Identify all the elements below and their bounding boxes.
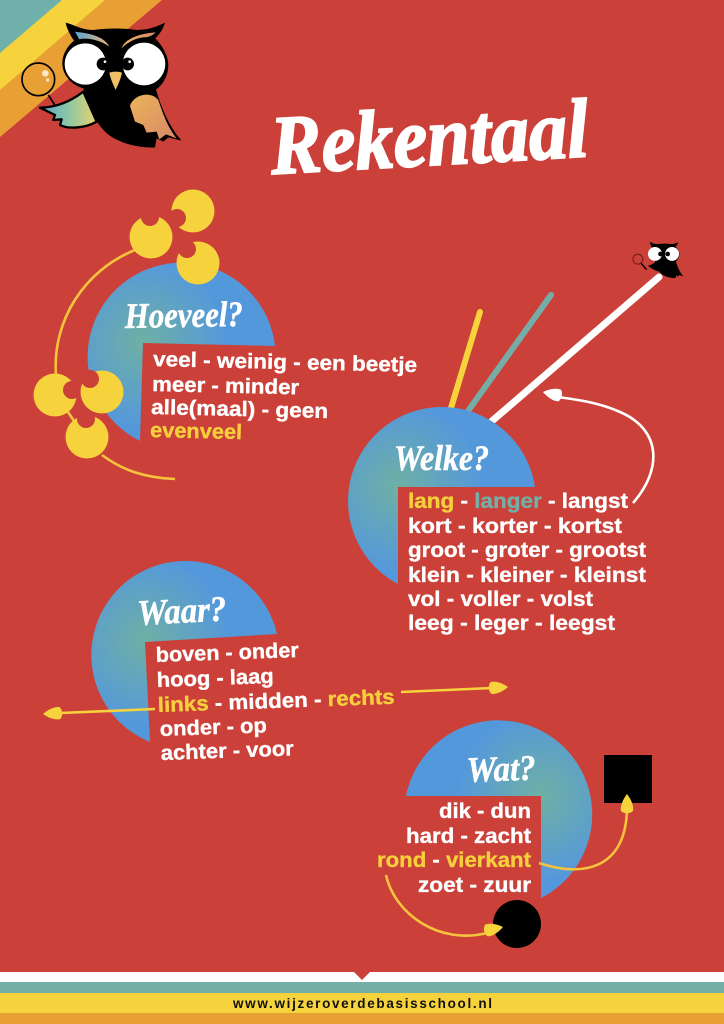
word list: Welke: vol - voller - volst — [408, 588, 593, 611]
word list: Waar: boven - onder — [155, 639, 299, 667]
panel: Waar — [43, 561, 508, 765]
footer url: www.wijzeroverdebasisschool.nl — [232, 996, 492, 1011]
word list: Waar: onder - op — [159, 714, 267, 741]
word list: Wat: zoet - zuur — [418, 874, 531, 897]
word list: Welke: lang - langer - langst — [408, 490, 628, 513]
word list: Waar: achter - voor — [160, 737, 294, 765]
word list: Hoeveel: alle(maal) - geen — [151, 396, 328, 423]
heading: Hoeveel?: Hoeveel? — [124, 294, 243, 336]
blue sector — [91, 561, 277, 742]
arrow: to square — [539, 794, 633, 869]
word list: Wat — [377, 800, 531, 897]
heading: Waar?: Waar? — [136, 588, 227, 633]
panel: Hoeveel — [34, 190, 417, 479]
word list: Hoeveel: meer - minder — [152, 373, 299, 399]
arrow: to longest bar — [542, 386, 653, 503]
icon: black square — [604, 755, 652, 803]
counters: yellow circles — [34, 190, 220, 458]
word list: Waar — [155, 639, 395, 765]
word list: Waar: links - midden - rechts — [157, 686, 395, 717]
word list: Hoeveel: veel - weinig - een beetje — [153, 348, 417, 377]
length bars — [451, 277, 659, 421]
word list: Welke: kort - korter - kortst — [408, 515, 622, 538]
panel: Wat — [377, 720, 652, 948]
icon: owl with magnifying glass — [22, 23, 182, 147]
word list: Wat: dik - dun — [439, 800, 531, 823]
title: Rekentaal — [267, 82, 591, 193]
heading: Welke?: Welke? — [394, 438, 489, 478]
word list: Waar: hoog - laag — [156, 665, 274, 692]
word list: Wat: rond - vierkant — [377, 849, 531, 872]
icon: small owl — [633, 242, 683, 278]
blue sector — [406, 720, 592, 898]
heading: Wat?: Wat? — [466, 748, 536, 790]
blue sector — [348, 407, 535, 584]
word list: Hoeveel: evenveel — [150, 419, 242, 444]
arrow: to circle — [386, 875, 504, 937]
word list: Wat: hard - zacht — [406, 825, 531, 848]
word list: Welke: klein - kleiner - kleinst — [408, 564, 646, 587]
blue sector — [88, 263, 275, 441]
panel: Welke — [348, 242, 683, 635]
arrow: left — [43, 707, 155, 720]
corner stripes — [0, 0, 162, 137]
footer bands — [0, 972, 724, 1024]
arcs connecting circles — [56, 250, 175, 479]
word list: Welke: leeg - leger - leegst — [408, 612, 615, 635]
word list: Welke — [408, 490, 646, 635]
arrow: right — [401, 681, 508, 694]
word list: Welke: groot - groter - grootst — [408, 539, 646, 562]
word list: Hoeveel — [150, 348, 417, 444]
icon: black circle — [493, 900, 541, 948]
